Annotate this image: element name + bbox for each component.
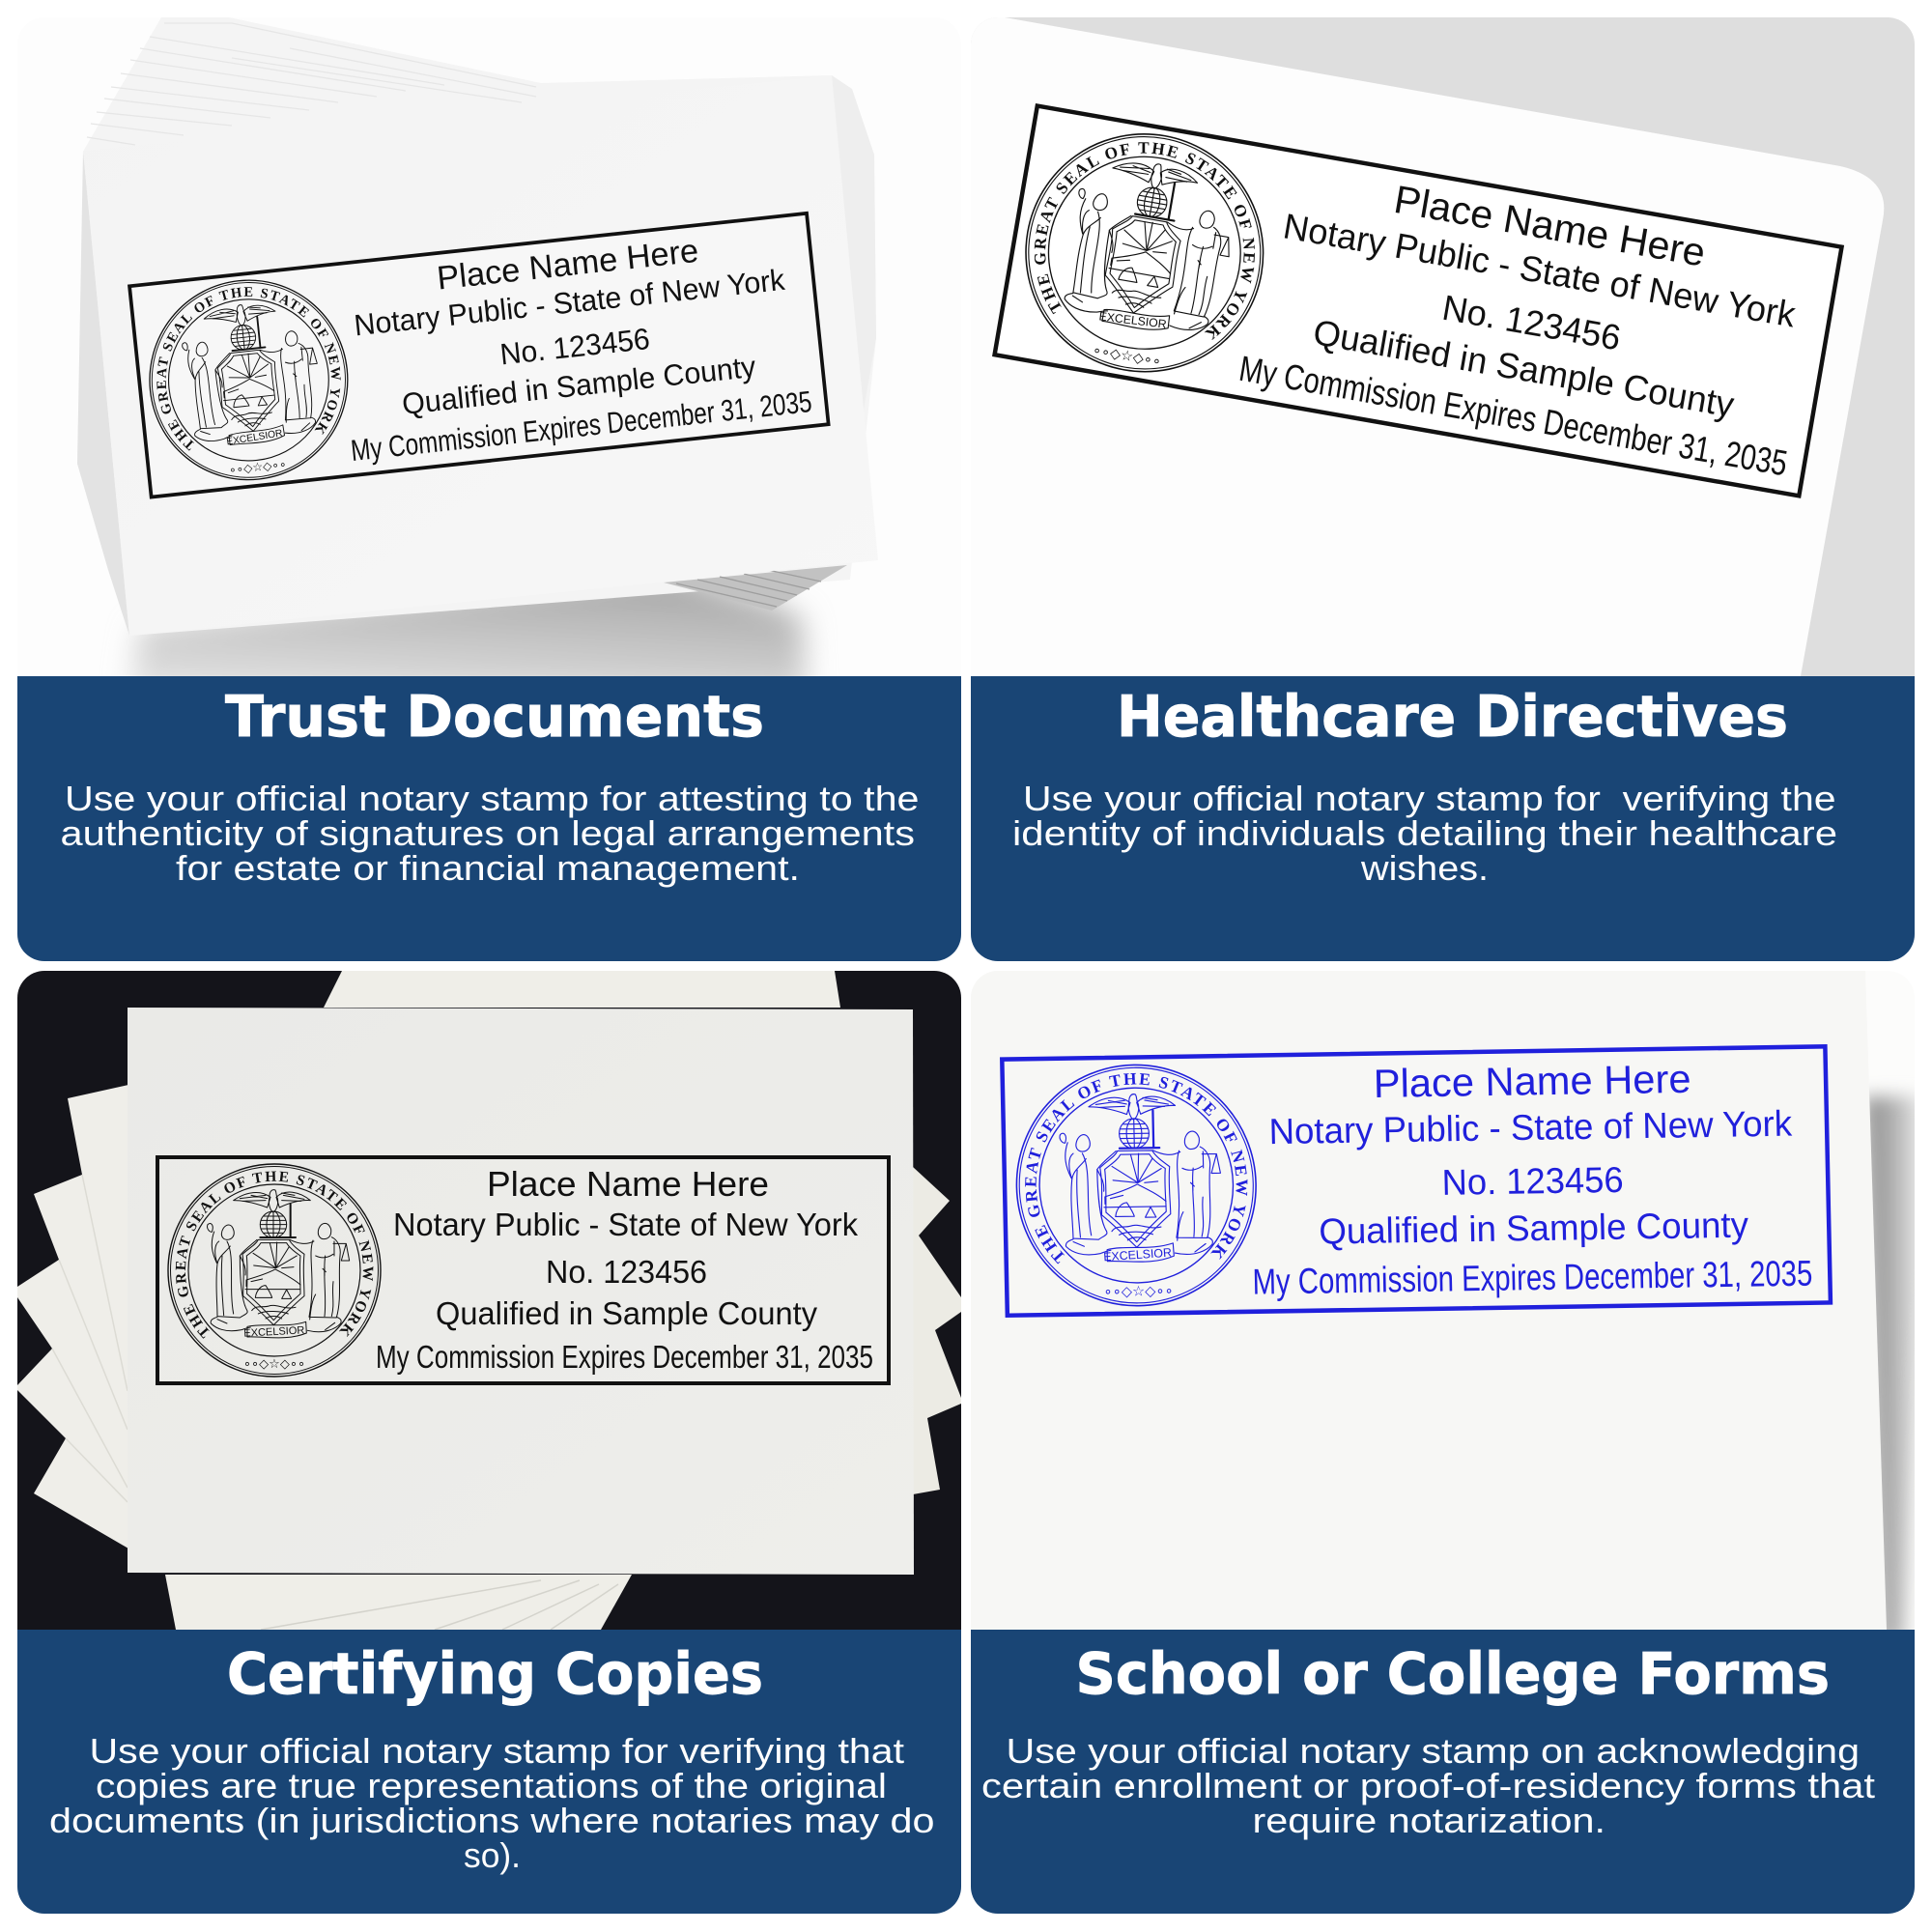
body text: require notarization. bbox=[1252, 1801, 1605, 1840]
body text: wishes. bbox=[1360, 848, 1489, 888]
panel: healthcare directives bbox=[971, 17, 1915, 961]
state seal: EXCELSIOR bbox=[226, 428, 283, 448]
stamp text: My Commission Expires December 31, 2035 bbox=[1236, 349, 1790, 484]
state seal: ∘∘◇☆◇∘∘ bbox=[228, 457, 287, 477]
stamp text: No. 123456 bbox=[1439, 288, 1624, 357]
caption band bbox=[971, 1630, 1915, 1914]
heading: Trust Documents bbox=[225, 683, 764, 750]
stamp text: Qualified in Sample County bbox=[436, 1295, 817, 1331]
stamp text bbox=[376, 1164, 873, 1375]
panel: trust documents bbox=[17, 17, 961, 961]
state seal: THE GREAT SEAL OF THE STATE OF NEW YORK bbox=[1025, 1072, 1248, 1264]
body text bbox=[49, 1731, 934, 1875]
panel: school or college forms bbox=[971, 971, 1915, 1914]
stamp text bbox=[1240, 185, 1796, 475]
stamp impression bbox=[1000, 1044, 1833, 1318]
stamp text: Notary Public - State of New York bbox=[1281, 206, 1799, 335]
stamp text: Notary Public - State of New York bbox=[1268, 1103, 1793, 1151]
stamp impression bbox=[156, 1155, 891, 1385]
body text bbox=[981, 1731, 1875, 1840]
state seal: EXCELSIOR bbox=[1103, 1246, 1172, 1264]
state seal: THE GREAT SEAL OF THE STATE OF NEW YORK bbox=[156, 287, 341, 451]
stamp text: Notary Public - State of New York bbox=[353, 263, 787, 343]
stamp text: No. 123456 bbox=[1441, 1159, 1624, 1203]
stamp text: Qualified in Sample County bbox=[1311, 312, 1738, 425]
stamp text: My Commission Expires December 31, 2035 bbox=[349, 384, 813, 468]
stamp text: Place Name Here bbox=[436, 233, 700, 298]
stamp text: No. 123456 bbox=[546, 1254, 707, 1290]
stamp text: Place Name Here bbox=[487, 1164, 769, 1204]
stamp text: No. 123456 bbox=[498, 322, 651, 372]
photo background: stack of cards bbox=[77, 17, 877, 676]
panel: certifying copies bbox=[17, 971, 961, 1914]
state seal: THE GREAT SEAL OF THE STATE OF NEW YORK bbox=[1034, 142, 1256, 340]
caption band bbox=[17, 1630, 961, 1914]
body text: for estate or financial management. bbox=[176, 848, 800, 888]
body text bbox=[60, 779, 920, 888]
body text bbox=[1014, 785, 1835, 881]
stamp text bbox=[352, 243, 811, 466]
photo background: fanned sheets on black bbox=[17, 971, 961, 1630]
body text: Use your official notary stamp for attesting to the bbox=[65, 779, 920, 818]
body text: Use your official notary stamp for verifying that bbox=[89, 1731, 904, 1771]
state seal: ∘∘◇☆◇∘∘ bbox=[243, 1357, 305, 1372]
body text: copies are true representations of the original bbox=[96, 1766, 887, 1805]
stamp text: Place Name Here bbox=[1391, 177, 1709, 275]
state seal: EXCELSIOR bbox=[243, 1324, 305, 1340]
photo background: tilted white card bbox=[971, 16, 1915, 676]
state seal: ∘∘◇☆◇∘∘ bbox=[1092, 343, 1162, 370]
stamp text bbox=[1248, 1055, 1813, 1302]
caption band bbox=[971, 676, 1915, 961]
stamp text: Qualified in Sample County bbox=[401, 350, 757, 421]
body text: authenticity of signatures on legal arrangements bbox=[60, 813, 915, 853]
body text: so). bbox=[464, 1835, 521, 1875]
photo background: paper sheet with shadow bbox=[971, 971, 1922, 1642]
body text: certain enrollment or proof-of-residency forms that bbox=[981, 1766, 1875, 1805]
state seal: EXCELSIOR bbox=[1098, 309, 1167, 331]
state seal: THE GREAT SEAL OF THE STATE OF NEW YORK bbox=[176, 1171, 373, 1339]
stamp text: Notary Public - State of New York bbox=[393, 1207, 858, 1242]
stamp text: Qualified in Sample County bbox=[1319, 1205, 1749, 1252]
body text: Use your official notary stamp on acknowledging bbox=[1007, 1731, 1860, 1771]
body text: Use your official notary stamp for verifying the bbox=[1023, 779, 1835, 818]
stamp impression bbox=[128, 211, 831, 499]
heading: Healthcare Directives bbox=[1117, 683, 1788, 750]
body text: documents (in jurisdictions where notaries may do bbox=[49, 1801, 934, 1840]
stamp impression bbox=[992, 103, 1845, 498]
stamp text: Place Name Here bbox=[1373, 1057, 1691, 1106]
state seal: ∘∘◇☆◇∘∘ bbox=[1103, 1283, 1174, 1300]
caption band bbox=[17, 676, 961, 961]
stamp text: My Commission Expires December 31, 2035 bbox=[376, 1339, 873, 1375]
heading: Certifying Copies bbox=[227, 1640, 763, 1707]
body text: identity of individuals detailing their healthcare bbox=[1012, 813, 1837, 853]
heading: School or College Forms bbox=[1076, 1640, 1830, 1707]
